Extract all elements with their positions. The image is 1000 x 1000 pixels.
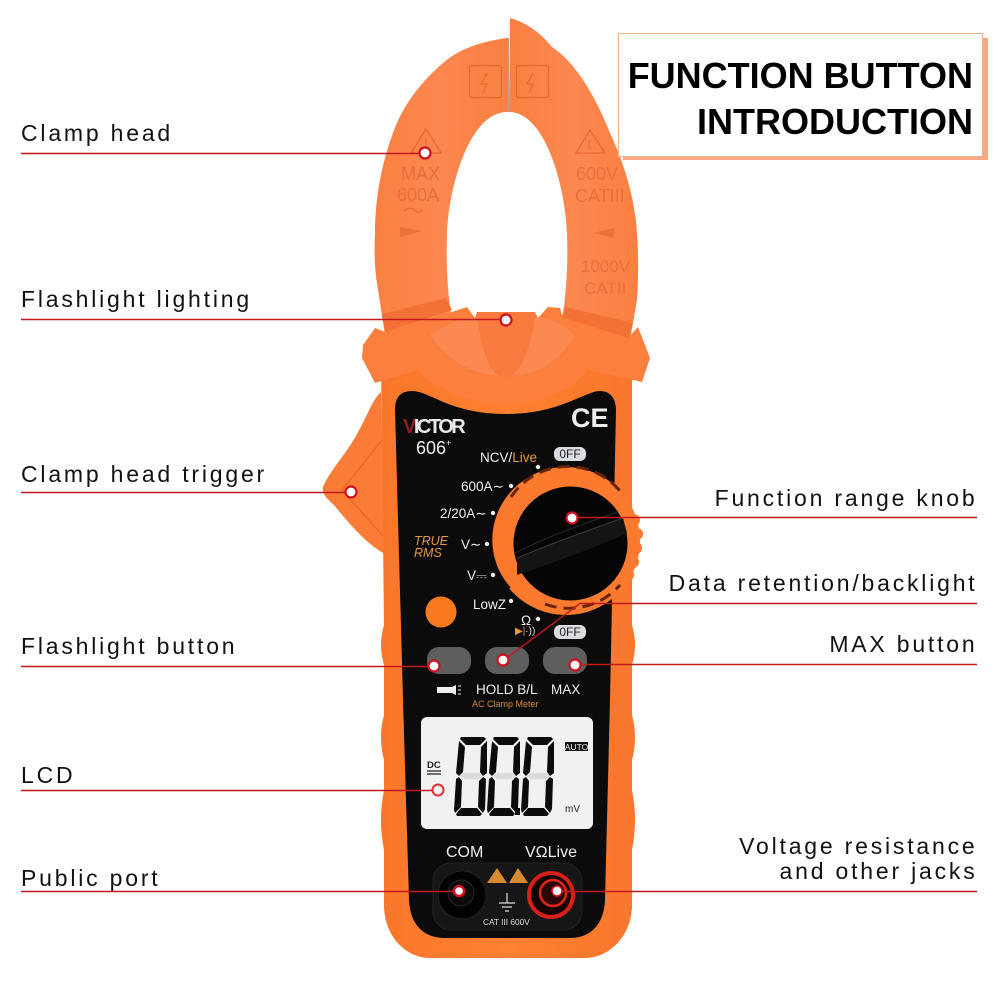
- label: data retention/backlight: [498, 570, 978, 666]
- jaw text: !: [424, 136, 428, 150]
- dial labels: V∼: [461, 537, 481, 552]
- label: public port: Public port: [21, 865, 160, 891]
- jaw text: CATIII: [575, 186, 625, 206]
- jaw text: [397, 136, 631, 298]
- jaw text: 600V: [576, 164, 618, 184]
- brand: [403, 416, 466, 458]
- clamp head jaws: [375, 18, 638, 340]
- dial labels: NCV/Live: [480, 450, 537, 465]
- true rms: [414, 534, 449, 560]
- label: data retention/backlight: Data retention/backlight: [669, 570, 978, 596]
- OFF badges: [554, 447, 586, 639]
- jaw markings: [404, 66, 605, 212]
- label: clamp head: Clamp head: [21, 120, 173, 146]
- dial labels: LowZ: [473, 597, 506, 612]
- dial labels: V⎓: [467, 568, 487, 583]
- OFF badges: 0FF: [559, 447, 581, 461]
- label: flashlight button: Flashlight button: [21, 633, 237, 659]
- label: public port: [21, 865, 464, 896]
- CE mark: CE: [571, 403, 609, 433]
- title box: INTRODUCTION: [697, 101, 973, 142]
- dial labels: Ω: [521, 613, 531, 628]
- jaw text: 1000V: [581, 257, 631, 276]
- dial labels: 2/20A∼: [440, 506, 487, 521]
- function knob: [491, 466, 643, 615]
- port panel: [433, 863, 582, 930]
- label: flashlight lighting: Flashlight lighting: [21, 286, 252, 312]
- function buttons: [427, 647, 587, 674]
- front panel: [395, 391, 616, 938]
- jaw text: MAX: [401, 164, 440, 184]
- brand: 606: [416, 438, 446, 458]
- label: max button: MAX button: [829, 631, 978, 657]
- label: max button: [570, 631, 978, 670]
- collar: [362, 298, 650, 404]
- brand: VICTOR: [403, 416, 466, 438]
- jaw text: CATII: [584, 279, 626, 298]
- label: clamp head: [21, 120, 430, 158]
- title box: FUNCTION BUTTON: [628, 55, 973, 96]
- port labels: [446, 844, 577, 861]
- title box: [618, 34, 988, 160]
- label: clamp head trigger: [21, 461, 356, 498]
- brand: +: [446, 438, 451, 448]
- label: LCD: [21, 762, 444, 796]
- dial labels: [440, 450, 540, 637]
- dial labels: 600A∼: [461, 479, 504, 494]
- flashlight button: [426, 596, 456, 628]
- clamp meter illustration: [323, 18, 650, 958]
- label: LCD: LCD: [21, 762, 75, 788]
- port labels: VΩLive: [525, 844, 577, 861]
- label: clamp head trigger: Clamp head trigger: [21, 461, 267, 487]
- button labels: MAX: [551, 682, 580, 697]
- port labels: COM: [446, 844, 483, 861]
- button labels: [437, 682, 580, 709]
- true rms: TRUE: [414, 534, 449, 548]
- label: voltage resistance and other jacks: Voltage resistance: [739, 833, 978, 859]
- OFF badges: 0FF: [559, 625, 581, 639]
- port panel: CAT III 600V: [483, 917, 530, 927]
- jaw text: 600A: [397, 185, 439, 205]
- label: function range knob: Function range knob: [715, 485, 978, 511]
- LCD screen: DC: [427, 760, 441, 771]
- jaw text: !: [587, 136, 592, 152]
- clamp head trigger: [323, 392, 385, 554]
- true rms: RMS: [414, 546, 442, 560]
- button labels: HOLD B/L: [476, 682, 538, 697]
- LCD screen: AUTO: [565, 742, 589, 752]
- label: voltage resistance and other jacks: and other jacks: [780, 858, 978, 884]
- LCD screen: [421, 717, 593, 829]
- button labels: AC Clamp Meter: [472, 699, 539, 709]
- dial labels: ▶|·)): [515, 626, 535, 637]
- label: voltage resistance and other jacks: [552, 833, 978, 896]
- label: flashlight lighting: [21, 286, 512, 326]
- label: function range knob: [566, 485, 978, 524]
- LCD screen: mV: [565, 804, 580, 815]
- meter body: [381, 360, 635, 958]
- label: flashlight button: [21, 633, 440, 672]
